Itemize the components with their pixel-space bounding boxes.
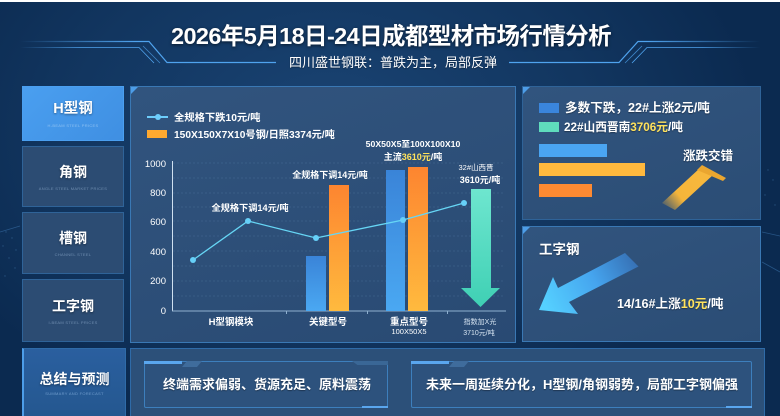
tab: 总结与预测 <box>22 348 126 416</box>
legend: 全规格下跌10元/吨 <box>174 111 261 124</box>
y axis and gridlines: 600 <box>150 217 166 228</box>
y axis and gridlines: 800 <box>150 188 166 199</box>
panel: H型钢 chart <box>130 86 516 343</box>
data labels: 32#山西晋 <box>458 162 494 172</box>
tab: 工字钢: 工字钢 <box>52 298 94 314</box>
callout: forecast <box>411 361 752 408</box>
tab: 总结与预测: SUMMARY AND FORECAST <box>45 391 104 396</box>
y axis and gridlines: 200 <box>150 276 166 287</box>
bars: 关键型号 <box>306 185 349 311</box>
tab: 槽钢: CHANNEL STEEL <box>55 252 91 257</box>
callout: demand <box>144 361 388 408</box>
upper right legend and bars <box>539 103 726 210</box>
panel: summary <box>130 348 765 416</box>
callout: forecast: 未来一周延续分化，H型钢/角钢弱势，局部工字钢偏强 <box>426 377 738 392</box>
legend swatches <box>539 103 559 132</box>
tab: 角钢: 角钢 <box>59 164 87 180</box>
data labels: 主流3610元/吨 <box>384 151 442 162</box>
y axis and gridlines: 1000 <box>145 159 166 170</box>
horizontal bars <box>539 144 645 197</box>
tab: 工字钢: I-BEAM STEEL PRICES <box>48 320 98 325</box>
header decoration lines <box>24 40 756 64</box>
x axis labels: 指数加X光 <box>464 317 496 326</box>
tab: H型钢 <box>22 86 124 141</box>
tab: 角钢 <box>22 146 124 207</box>
callout: demand: 终端需求偏弱、货源充足、原料震荡 <box>163 377 371 392</box>
y axis and gridlines: 0 <box>161 306 166 317</box>
tab: 槽钢: 槽钢 <box>59 230 87 246</box>
x axis labels: 100X50X5 <box>391 327 427 336</box>
text: 涨跌交错: 涨跌交错 <box>683 149 733 163</box>
tab: H型钢: H-BEAM STEEL PRICES <box>48 123 98 128</box>
x axis labels: H型钢模块 <box>209 316 254 328</box>
arrow: teal down <box>461 189 500 307</box>
data labels: 全规格下调14元/吨 <box>292 169 368 180</box>
tab: 角钢: ANGLE STEEL MARKET PRICES <box>39 186 107 191</box>
data labels: 50X50X5至100X100X10 <box>366 139 461 149</box>
arrow: blue down-left <box>539 253 638 314</box>
y axis and gridlines: 400 <box>150 247 166 258</box>
x axis labels: 关键型号 <box>309 316 347 328</box>
text: 多数下跌: 多数下跌，22#上涨2元/吨 <box>565 101 710 115</box>
trend line <box>190 200 467 263</box>
data labels <box>211 139 500 213</box>
tab: H型钢: H型钢 <box>53 101 93 117</box>
y axis and gridlines <box>145 159 506 317</box>
heading: 工字钢: 工字钢 <box>539 242 580 257</box>
x axis labels <box>209 316 496 337</box>
data labels: 全规格下调14元/吨 <box>211 202 289 213</box>
data labels: 3610元/吨 <box>460 174 500 185</box>
subtitle: 四川盛世钢联：普跌为主，局部反弹 <box>289 55 497 70</box>
panel: upper right <box>522 86 761 220</box>
x axis labels: 3710元/吨 <box>463 328 495 337</box>
x axis labels: 重点型号 <box>390 316 428 328</box>
tab: 工字钢 <box>22 279 124 342</box>
legend <box>147 111 335 141</box>
text: 22#山西晋南: 22#山西晋南3706元/吨 <box>564 121 683 134</box>
tab: 总结与预测: 总结与预测 <box>40 371 110 387</box>
bars: 重点型号 <box>386 167 428 311</box>
arrow: gold diagonal <box>662 165 726 210</box>
tab: 槽钢 <box>22 212 124 274</box>
title: 2026年5月18日-24日成都型材市场行情分析 <box>171 23 611 49</box>
chart: combined line and bar chart <box>145 111 506 337</box>
text: 14/16#上涨10元/吨: 14/16#上涨10元/吨 <box>617 297 723 311</box>
legend: 150X150X7X10号钢/日照3374元/吨 <box>174 128 335 141</box>
panel: 工字钢 <box>522 226 761 342</box>
